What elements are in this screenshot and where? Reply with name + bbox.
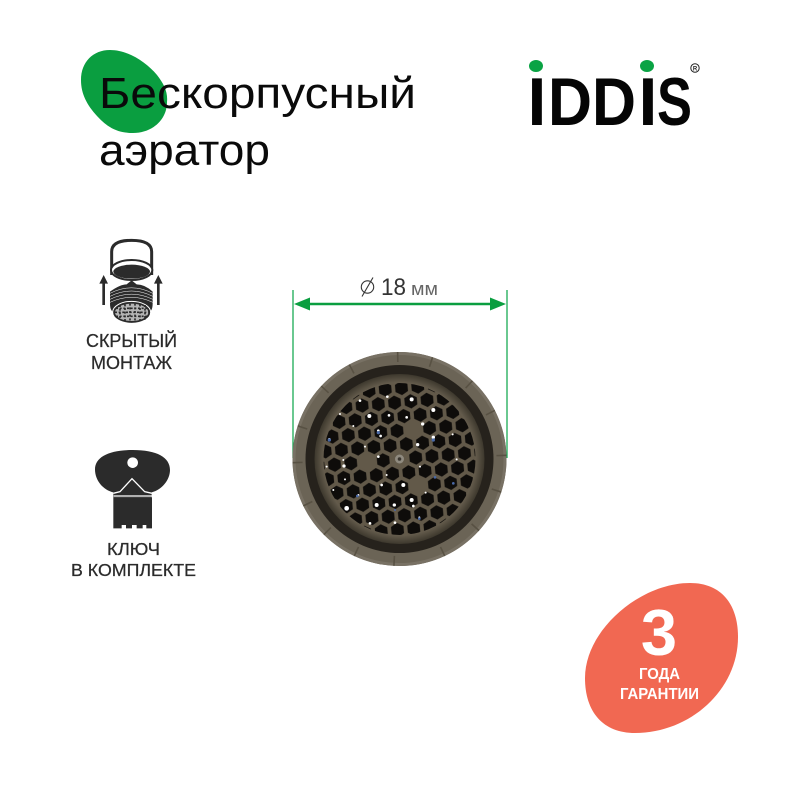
dimension: diameter 18 mm: 18: [381, 274, 406, 301]
aerator product photo: [292, 352, 506, 566]
label: key included: [71, 539, 196, 580]
dimension: diameter 18 mm: [293, 274, 507, 458]
warranty badge: ГОДА: [639, 666, 680, 683]
IDDIS logo: I: [528, 64, 546, 140]
label: key included: В КОМПЛЕКТЕ: [71, 560, 196, 580]
centre pin: [395, 454, 404, 464]
warranty badge: ГАРАНТИИ: [620, 686, 699, 703]
IDDIS logo: D: [592, 64, 636, 140]
warranty badge: 3: [641, 596, 677, 669]
title: [99, 69, 416, 175]
warranty badge: [585, 583, 738, 733]
green blob behind title: [81, 50, 167, 133]
IDDIS logo: S: [657, 64, 692, 140]
label: hidden mounting: СКРЫТЫЙ: [86, 330, 177, 351]
label: hidden mounting: МОНТАЖ: [91, 353, 172, 373]
title: Бескорпусный: [99, 69, 416, 118]
IDDIS logo: R: [693, 66, 698, 72]
IDDIS logo: I: [638, 64, 657, 140]
speckles: [326, 395, 458, 525]
arrow up left: [99, 275, 108, 305]
label: hidden mounting: [86, 330, 177, 373]
icon: hidden mounting: [99, 240, 163, 323]
filled hexes: [356, 419, 427, 500]
icon: key: [95, 450, 170, 528]
dimension: diameter 18 mm: мм: [411, 279, 438, 299]
label: key included: КЛЮЧ: [107, 539, 160, 559]
title: аэратор: [99, 126, 270, 175]
IDDIS logo: [528, 60, 699, 140]
rim notches: [293, 352, 506, 566]
IDDIS logo: D: [548, 64, 592, 140]
arrow up right: [154, 275, 163, 305]
